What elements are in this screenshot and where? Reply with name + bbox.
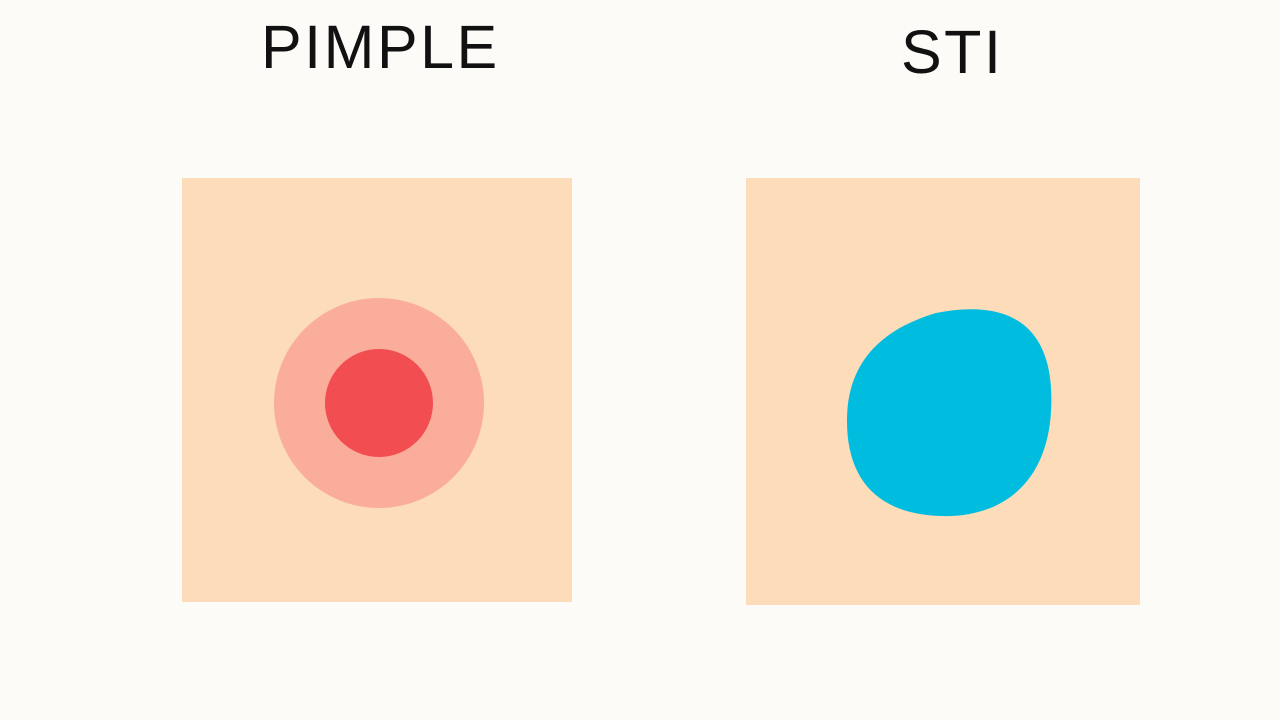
panel: pimple: [182, 178, 572, 602]
icon: sti lesion: [847, 309, 1051, 516]
title: pimple: PIMPLE: [261, 13, 500, 81]
icon: pimple: [274, 298, 484, 508]
title: sti: STI: [901, 18, 1003, 86]
panel: sti: [746, 178, 1140, 605]
